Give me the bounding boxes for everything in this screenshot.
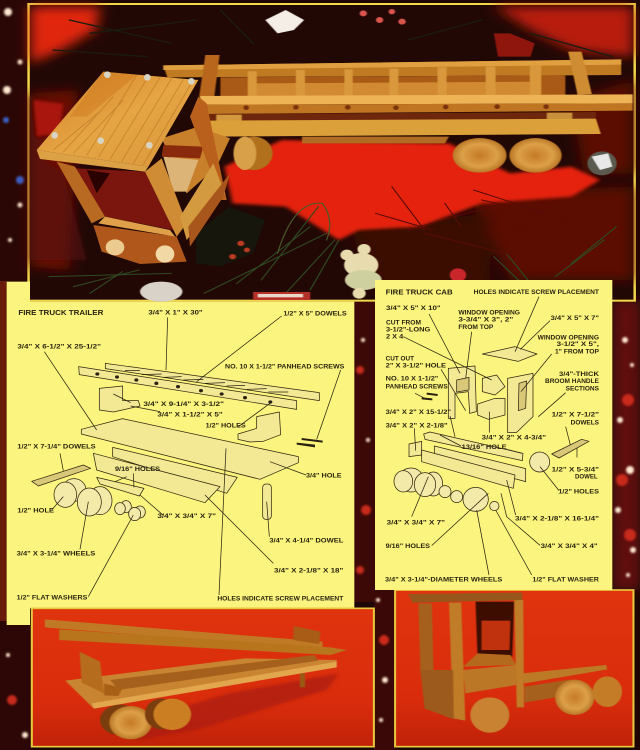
labels: CUT OUT — [386, 356, 414, 362]
labels: 3/4" X 1" X 30" — [148, 311, 203, 317]
labels: 1/2" HOLE — [17, 509, 54, 515]
cab rear wheels — [235, 137, 273, 170]
labels: 1/2" X 5" DOWELS — [283, 311, 347, 317]
labels: 3/4" X 4-1/4" DOWEL — [269, 539, 344, 545]
labels: 3/4" X 2" X 2-1/8" — [386, 423, 448, 429]
labels: HOLES INDICATE SCREW PLACEMENT — [217, 596, 344, 602]
labels: 1/2" FLAT WASHERS — [17, 595, 87, 601]
labels: 1/2" HOLES — [206, 423, 246, 429]
cab interior — [75, 168, 173, 230]
screws — [427, 393, 438, 396]
small block — [409, 441, 422, 457]
labels: 3/4" X 1-1/2" X 5" — [157, 413, 223, 419]
roof — [408, 593, 522, 603]
trailer end brackets — [568, 52, 592, 95]
ladder near rail — [200, 94, 633, 105]
near ladder rail — [79, 367, 297, 409]
rear post — [190, 97, 227, 200]
labels: WINDOW OPENING — [458, 310, 520, 316]
labels: DOWEL — [575, 474, 598, 480]
cross block — [478, 398, 505, 419]
angel ornament — [265, 10, 304, 33]
cookie ornaments — [140, 268, 466, 302]
trailer exploded drawing — [32, 363, 323, 521]
labels: 3/4" X 3/4" X 7" — [157, 514, 216, 520]
wheels — [62, 479, 86, 501]
wheels — [100, 705, 141, 735]
labels: 1/2" X 7-1/2" — [552, 413, 599, 419]
dark gap — [208, 112, 596, 121]
left front pillar — [57, 162, 105, 223]
ladder rungs — [248, 65, 541, 97]
front pillar — [449, 603, 465, 721]
panel background — [7, 282, 354, 625]
red berry ornaments — [360, 9, 535, 57]
labels: 1" FROM TOP — [555, 349, 599, 355]
labels: 2 X 4 — [386, 335, 404, 341]
under-deck rails — [113, 447, 237, 493]
far ladder rail — [105, 363, 319, 401]
red carpet under truck — [224, 140, 600, 240]
labels: 1/2" X 7-1/4" DOWELS — [17, 445, 96, 451]
labels: 9/16" HOLES — [386, 544, 430, 550]
panel background — [375, 280, 612, 590]
labels: 3/4" X 3/4" X 7" — [387, 520, 445, 526]
trailer deck seen through ladder — [220, 75, 565, 97]
shadow under trailer — [106, 673, 339, 740]
labels: FROM TOP — [458, 325, 493, 331]
ladder far rail — [45, 619, 322, 649]
wheels — [470, 697, 509, 733]
labels — [17, 310, 347, 602]
top bar — [424, 432, 523, 461]
wheels — [398, 468, 424, 492]
labels: NO. 10 X 1-1/2" PANHEAD SCREWS — [225, 365, 344, 371]
post dowel — [300, 673, 305, 687]
lower cab — [93, 225, 187, 264]
deck — [522, 665, 607, 683]
teddy bear ornament — [340, 244, 382, 299]
labels: FIRE TRUCK TRAILER — [18, 310, 103, 317]
roof — [482, 347, 537, 361]
labels: DOWELS — [571, 420, 599, 426]
labels: 3/4" HOLE — [306, 473, 342, 479]
ladder rungs and leader lines — [44, 316, 341, 597]
labels: 3/4" X 5" X 10" — [386, 306, 441, 312]
labels: PANHEAD SCREWS — [386, 384, 448, 390]
bumpers — [106, 239, 124, 255]
labels: 3/4" X 2" X 15-1/2" — [386, 410, 451, 416]
right pillar — [514, 600, 524, 707]
dowels — [552, 439, 589, 458]
side rail — [463, 665, 516, 693]
panel: fire truck cab diagram — [375, 280, 612, 590]
trailer wheels — [453, 138, 507, 173]
ladder near rail — [59, 629, 347, 655]
labels: 9/16" HOLES — [115, 467, 160, 473]
roof screws — [51, 71, 195, 149]
right bracket — [238, 412, 281, 442]
dowels — [32, 465, 91, 486]
labels: 3/4" X 6-1/2" X 25-1/2" — [17, 344, 101, 350]
center front pillar — [145, 158, 187, 237]
labels: HOLES INDICATE SCREW PLACEMENT — [474, 290, 599, 296]
trailer deck edge — [204, 119, 601, 137]
left pillar — [418, 603, 433, 670]
labels: 3/4" X 3-1/4" WHEELS — [17, 551, 95, 557]
labels: 3/4" X 5" X 7" — [551, 316, 599, 322]
labels: 3/4" X 3-1/4"-DIAMETER WHEELS — [385, 577, 502, 583]
labels: 2" X 3-1/2" HOLE — [386, 364, 446, 370]
labels: NO. 10 X 1-1/2" — [386, 377, 439, 383]
panel: fire truck trailer diagram — [7, 282, 354, 625]
small crossbar — [97, 477, 144, 496]
labels: 1/2" X 5-3/4" — [552, 467, 599, 473]
photo: trailer side view — [32, 608, 374, 747]
labels — [385, 289, 600, 583]
trailer model — [163, 52, 633, 173]
dark berries — [196, 207, 265, 267]
labels: CUT FROM — [386, 320, 421, 326]
trailer deck — [81, 419, 298, 479]
cab exploded drawing — [394, 347, 589, 511]
labels: SECTIONS — [566, 386, 599, 392]
labels: 3/4" X 2" X 4-3/4" — [482, 435, 546, 441]
ladder holes — [95, 372, 272, 404]
screws — [302, 438, 323, 443]
chassis rails — [434, 446, 526, 482]
labels: 1/2" FLAT WASHER — [532, 577, 600, 583]
left bracket — [80, 652, 104, 693]
labels: 3/4" X 9-1/4" X 3-1/2" — [143, 402, 224, 408]
post dowel — [263, 484, 271, 519]
photo: cab front view — [395, 590, 633, 747]
labels: 3/4" X 2-1/8" X 16-1/4" — [515, 517, 599, 523]
labels: WINDOW OPENING — [538, 335, 599, 341]
right cab side — [508, 373, 533, 433]
labels: 3/4"-THICK — [559, 372, 600, 378]
right side panel — [180, 163, 225, 240]
truck cab in photo — [30, 71, 230, 264]
dark cab surroundings — [30, 97, 87, 260]
cab rear window — [476, 602, 514, 657]
labels: 3-1/2"-LONG — [386, 327, 431, 333]
trailer ladder far rail — [163, 59, 621, 77]
trailer deck surface — [65, 658, 337, 709]
cab front lower — [420, 670, 454, 719]
roof — [37, 72, 198, 167]
silver ball ornament — [587, 151, 617, 175]
photo: fire truck top view with trailer and ladder — [29, 4, 635, 302]
washers — [121, 501, 131, 513]
end bracket — [293, 626, 320, 644]
pine branches — [49, 10, 616, 293]
inner cut block — [482, 375, 505, 395]
labels: 13/16" HOLE — [462, 445, 507, 451]
leader lines — [403, 297, 577, 575]
left cab side — [448, 366, 476, 418]
labels: BROOM HANDLE — [545, 379, 599, 385]
labels: 3-3/4" X 3", 2" — [458, 318, 514, 324]
labels: 3/4" X 3/4" X 4" — [541, 544, 598, 550]
labels: FIRE TRUCK CAB — [386, 289, 453, 296]
left bracket — [99, 386, 140, 412]
red and dark background of photo — [31, 7, 633, 287]
labels: 1/2" HOLES — [558, 489, 599, 495]
labels: 3/4" X 2-1/8" X 18" — [274, 568, 344, 574]
labels: 3-1/2" X 5", — [557, 342, 599, 348]
